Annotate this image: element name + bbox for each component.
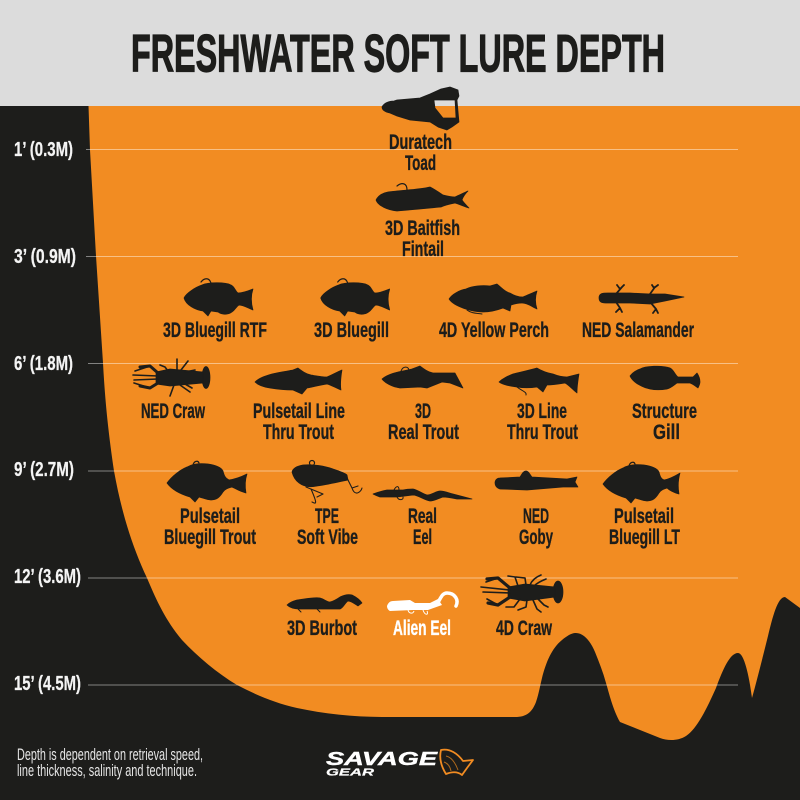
icon: bluegill <box>603 462 680 503</box>
wordmark: SAVAGE <box>326 748 438 769</box>
lure: Pulsetail Bluegill LT <box>603 462 680 549</box>
icon: eel <box>373 487 472 501</box>
lure: 3D Line Thru Trout <box>499 368 579 444</box>
depth labels: 6’ (1.8M) <box>14 352 73 375</box>
icon: logo fan <box>440 750 473 775</box>
lure: 3D Baitfish Fintail <box>376 184 469 261</box>
label: 3D <box>415 400 431 423</box>
depth labels <box>14 138 81 695</box>
label <box>388 400 459 444</box>
wordmark: GEAR <box>326 766 375 778</box>
label <box>408 505 437 549</box>
label: Soft Vibe <box>297 526 358 549</box>
label: Alien Eel <box>393 617 451 640</box>
label: Duratech <box>389 131 452 154</box>
lure: 3D Bluegill RTF <box>163 279 267 342</box>
label: Bluegill LT <box>609 526 680 549</box>
depth labels: 1’ (0.3M) <box>14 138 73 161</box>
wordmark <box>326 748 438 778</box>
icon: burbot <box>287 595 362 612</box>
label: Real <box>408 505 437 528</box>
label <box>385 217 460 261</box>
label <box>632 400 697 444</box>
lure: 3D Real Trout <box>382 366 463 444</box>
lure: NED Craw <box>133 359 210 423</box>
label <box>519 505 553 549</box>
label <box>297 505 358 549</box>
icon: salamander <box>599 285 684 313</box>
depth labels: 12’ (3.6M) <box>14 565 81 588</box>
lure: 3D Burbot <box>287 595 362 640</box>
lure: Alien Eel (highlighted) <box>387 593 457 640</box>
depth labels: 9’ (2.7M) <box>14 458 74 481</box>
label: Eel <box>413 526 432 549</box>
footnote: line thickness, salinity and technique. <box>17 761 197 780</box>
label: 3D Bluegill RTF <box>163 319 267 342</box>
label: 3D Burbot <box>287 617 357 640</box>
icon: bluegill <box>167 461 247 502</box>
label <box>609 505 680 549</box>
label: Gill <box>653 421 680 444</box>
icon: crawfish <box>481 575 563 612</box>
depth labels: 3’ (0.9M) <box>14 245 76 268</box>
label: Goby <box>519 526 553 549</box>
lure: TPE Soft Vibe <box>292 460 362 549</box>
icon: bluegill <box>321 279 390 316</box>
icon: trout <box>255 368 342 394</box>
label: 4D Yellow Perch <box>439 319 549 342</box>
label: Fintail <box>402 238 444 261</box>
footnote: Depth is dependent on retrieval speed, <box>17 745 203 764</box>
depth labels: 15’ (4.5M) <box>14 672 81 695</box>
lure: 4D Yellow Perch <box>439 284 549 342</box>
label: Pulsetail <box>614 505 674 528</box>
depth lines <box>86 150 738 685</box>
label: Thru Trout <box>507 421 578 444</box>
lure: 3D Bluegill <box>314 279 390 342</box>
label: 4D Craw <box>496 617 552 640</box>
icon: baitfish <box>376 184 469 211</box>
label <box>389 131 452 175</box>
label: NED Craw <box>141 400 205 423</box>
icon: bluegill <box>184 279 253 316</box>
icon: toad <box>382 87 459 130</box>
label: Thru Trout <box>263 421 334 444</box>
icon: gill <box>630 366 700 390</box>
icon: trout <box>382 366 463 388</box>
label: 3D Baitfish <box>385 217 460 240</box>
icon: perch <box>449 284 537 314</box>
lure: NED Salamander <box>582 285 694 342</box>
lure: Structure Gill <box>630 366 700 444</box>
label: Real Trout <box>388 421 459 444</box>
label: Structure <box>632 400 697 423</box>
label <box>253 400 345 444</box>
label: NED Salamander <box>582 319 694 342</box>
label: Bluegill Trout <box>164 526 256 549</box>
logo: Savage Gear <box>326 748 473 778</box>
lure: NED Goby <box>495 471 578 549</box>
label <box>507 400 578 444</box>
lure: Pulsetail Line Thru Trout <box>253 368 345 444</box>
water body <box>88 106 800 740</box>
label: TPE <box>315 505 339 528</box>
icon: vibe lure <box>292 460 362 503</box>
lure: Real Eel <box>373 487 472 549</box>
icon: crawfish <box>133 359 210 396</box>
icon: trout <box>499 368 579 395</box>
label: Toad <box>405 152 436 175</box>
lure: 4D Craw <box>481 575 563 640</box>
label: 3D Bluegill <box>314 319 389 342</box>
label <box>164 505 256 549</box>
label: Pulsetail <box>180 505 240 528</box>
lure: Pulsetail Bluegill Trout <box>164 461 256 549</box>
label: Pulsetail Line <box>253 400 345 423</box>
icon: alien eel <box>387 593 457 614</box>
lure: Duratech Toad <box>382 87 459 175</box>
label: 3D Line <box>517 400 567 423</box>
footnote <box>17 745 203 780</box>
label: NED <box>523 505 549 528</box>
icon: goby <box>495 471 578 490</box>
